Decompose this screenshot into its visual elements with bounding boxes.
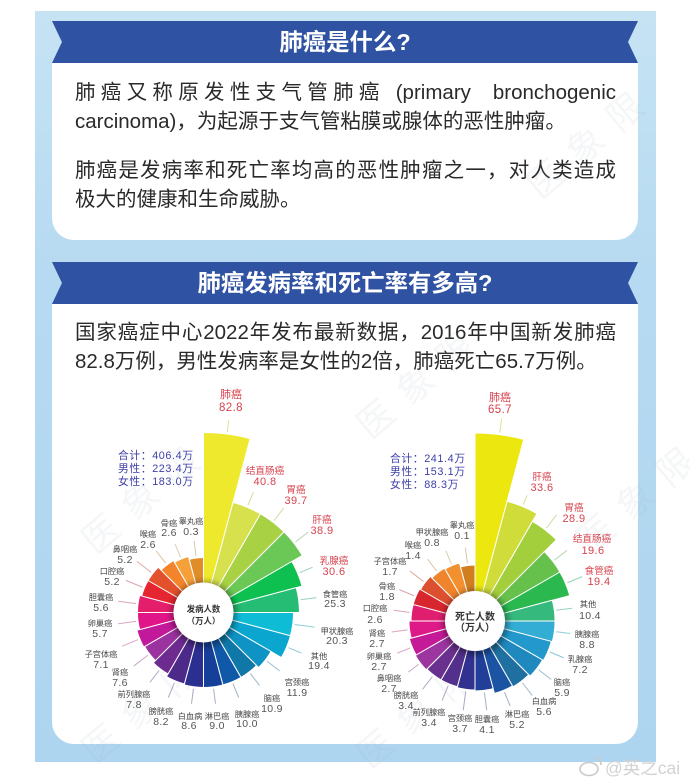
labels: deaths highlighted: 19.4 bbox=[587, 576, 611, 588]
labels: new cases others: 肾癌 bbox=[112, 667, 128, 677]
labels: deaths highlighted: 28.9 bbox=[562, 513, 586, 525]
labels: deaths others: 3.4 bbox=[421, 717, 437, 729]
labels: deaths highlighted: 33.6 bbox=[530, 482, 554, 494]
labels: deaths others: 睾丸癌 bbox=[450, 520, 474, 530]
labels: new cases highlighted: 结直肠癌 bbox=[246, 465, 285, 477]
labels: new cases others: 子宫体癌 bbox=[85, 649, 117, 659]
labels: deaths others: 2.7 bbox=[369, 638, 385, 650]
labels: deaths others: 10.4 bbox=[579, 610, 601, 622]
heading: what is lung cancer: 肺癌是什么? bbox=[279, 29, 411, 55]
weibo watermark: @英之cai bbox=[605, 758, 680, 778]
labels: deaths others: 1.7 bbox=[382, 566, 398, 578]
totals: new cases: 合计：406.4万 bbox=[118, 448, 194, 462]
labels: deaths highlighted bbox=[488, 390, 614, 588]
labels: new cases highlighted: 肺癌 bbox=[220, 387, 242, 401]
watermarks: 医象限 bbox=[349, 644, 495, 776]
labels: deaths others: 脑癌 bbox=[554, 677, 570, 687]
labels: new cases others: 7.8 bbox=[126, 699, 142, 711]
labels: deaths others: 宫颈癌 bbox=[448, 713, 472, 723]
watermarks: 医象限 bbox=[519, 74, 665, 206]
labels: new cases others: 25.3 bbox=[324, 598, 346, 610]
centre circle: deaths: （万人） bbox=[455, 622, 495, 634]
totals: deaths: 男性：153.1万 bbox=[390, 464, 466, 478]
heading: what is lung cancer bbox=[52, 21, 638, 63]
labels: new cases highlighted: 40.8 bbox=[253, 476, 277, 488]
leader lines: deaths bbox=[392, 419, 582, 710]
labels: deaths others: 子宫体癌 bbox=[374, 556, 406, 566]
labels: deaths highlighted: 食管癌 bbox=[585, 565, 614, 577]
labels: new cases others: 5.6 bbox=[93, 602, 109, 614]
labels: new cases highlighted: 38.9 bbox=[310, 525, 334, 537]
labels: deaths others: 口腔癌 bbox=[363, 603, 387, 613]
text: definition line 2: carcinoma)，为起源于支气管粘膜或腺体的恶性肿瘤。 bbox=[75, 110, 566, 133]
labels: deaths others: 骨癌 bbox=[379, 581, 395, 591]
text: severity line 1: 肺癌是发病率和死亡率均高的恶性肿瘤之一，对人类造成 bbox=[75, 159, 616, 182]
labels: new cases highlighted: 肝癌 bbox=[312, 514, 332, 526]
labels: deaths others: 1.8 bbox=[379, 591, 395, 603]
labels: deaths highlighted: 肺癌 bbox=[489, 390, 511, 404]
labels: new cases others bbox=[85, 516, 353, 732]
labels: new cases others: 2.6 bbox=[161, 527, 177, 539]
labels: deaths others: 8.8 bbox=[579, 639, 595, 651]
totals: deaths bbox=[390, 451, 466, 491]
text: severity line 2: 极大的健康和生命威胁。 bbox=[75, 188, 300, 211]
labels: new cases others: 7.1 bbox=[93, 659, 109, 671]
labels: deaths others: 鼻咽癌 bbox=[377, 673, 401, 683]
labels: deaths others: 3.4 bbox=[398, 700, 414, 712]
labels: deaths others: 2.6 bbox=[367, 614, 383, 626]
labels: new cases highlighted bbox=[219, 387, 349, 578]
labels: deaths others: 4.1 bbox=[479, 724, 495, 736]
labels: deaths highlighted: 肝癌 bbox=[532, 471, 552, 483]
labels: new cases others: 骨癌 bbox=[161, 518, 177, 528]
labels: deaths others: 甲状腺癌 bbox=[416, 527, 448, 537]
labels: deaths others: 白血病 bbox=[532, 696, 556, 706]
labels: new cases others: 鼻咽癌 bbox=[113, 544, 137, 554]
labels: deaths others: 卵巢癌 bbox=[367, 651, 391, 661]
labels: deaths others: 2.7 bbox=[371, 661, 387, 673]
labels: new cases highlighted: 乳腺癌 bbox=[320, 555, 349, 567]
labels: new cases others: 胰腺癌 bbox=[235, 709, 259, 719]
labels: deaths others: 3.7 bbox=[452, 723, 468, 735]
labels: deaths others: 其他 bbox=[580, 599, 596, 609]
totals: new cases: 女性：183.0万 bbox=[118, 474, 194, 488]
labels: new cases others: 5.7 bbox=[92, 628, 108, 640]
totals: deaths: 女性：88.3万 bbox=[390, 477, 459, 491]
labels: new cases others: 11.9 bbox=[287, 687, 307, 699]
labels: deaths others: 肾癌 bbox=[369, 628, 385, 638]
labels: new cases others: 7.6 bbox=[112, 677, 128, 689]
labels: deaths others: 胰腺癌 bbox=[575, 629, 599, 639]
labels: deaths others: 喉癌 bbox=[405, 540, 421, 550]
labels: deaths highlighted: 65.7 bbox=[488, 404, 512, 416]
leader lines: new cases bbox=[118, 420, 317, 704]
labels: new cases others: 卵巢癌 bbox=[88, 618, 112, 628]
centre circle: new cases bbox=[174, 582, 234, 642]
labels: new cases highlighted: 胃癌 bbox=[286, 484, 306, 496]
heading: how high are the rates bbox=[52, 262, 638, 304]
labels: deaths others bbox=[363, 520, 601, 736]
panel: what is lung cancer bbox=[52, 63, 638, 240]
labels: deaths highlighted: 胃癌 bbox=[564, 502, 584, 514]
labels: deaths others: 7.2 bbox=[572, 664, 588, 676]
labels: deaths others: 5.2 bbox=[509, 719, 525, 731]
labels: deaths others: 胆囊癌 bbox=[475, 714, 499, 724]
labels: new cases highlighted: 82.8 bbox=[219, 402, 243, 414]
labels: new cases others: 胆囊癌 bbox=[89, 592, 113, 602]
wedges: new cases bbox=[135, 432, 305, 690]
centre circle shadow: deaths bbox=[442, 590, 508, 656]
labels: deaths others: 乳腺癌 bbox=[568, 654, 592, 664]
labels: new cases others: 前列腺癌 bbox=[118, 689, 150, 699]
text: definition line 1: 肺癌又称原发性支气管肺癌 (primary bronchogenic bbox=[75, 81, 616, 104]
labels: new cases others: 10.0 bbox=[236, 718, 258, 730]
totals: new cases bbox=[118, 448, 194, 488]
labels: new cases others: 睾丸癌 bbox=[179, 516, 203, 526]
labels: deaths others: 0.1 bbox=[454, 530, 470, 542]
labels: new cases others: 食管癌 bbox=[323, 589, 347, 599]
labels: deaths others: 0.8 bbox=[424, 537, 440, 549]
labels: new cases others: 9.0 bbox=[209, 720, 225, 732]
wedges: deaths bbox=[407, 433, 573, 696]
labels: new cases others: 5.2 bbox=[104, 576, 120, 588]
heading: how high are the rates: 肺癌发病率和死亡率有多高? bbox=[198, 270, 492, 296]
centre circle: deaths: 死亡人数 bbox=[455, 610, 495, 623]
labels: new cases others: 20.3 bbox=[326, 635, 348, 647]
labels: deaths others: 1.4 bbox=[405, 550, 421, 562]
labels: deaths highlighted: 结直肠癌 bbox=[573, 533, 612, 545]
labels: deaths others: 5.6 bbox=[536, 706, 552, 718]
labels: deaths others: 2.7 bbox=[381, 683, 397, 695]
labels: new cases highlighted: 30.6 bbox=[322, 566, 346, 578]
panel: incidence and mortality bbox=[52, 304, 638, 744]
labels: deaths others: 淋巴癌 bbox=[505, 709, 529, 719]
labels: new cases others: 其他 bbox=[311, 651, 327, 661]
labels: new cases others: 白血病 bbox=[178, 711, 202, 721]
labels: new cases others: 喉癌 bbox=[140, 529, 156, 539]
labels: deaths others: 前列腺癌 bbox=[413, 707, 445, 717]
labels: new cases others: 2.6 bbox=[140, 539, 156, 551]
labels: new cases others: 19.4 bbox=[308, 660, 330, 672]
labels: new cases others: 甲状腺癌 bbox=[321, 626, 353, 636]
labels: deaths others: 5.9 bbox=[554, 687, 570, 699]
labels: new cases others: 脑癌 bbox=[264, 693, 280, 703]
labels: new cases highlighted: 39.7 bbox=[284, 495, 308, 507]
labels: new cases others: 膀胱癌 bbox=[149, 706, 173, 716]
labels: new cases others: 淋巴癌 bbox=[205, 711, 229, 721]
labels: deaths highlighted: 19.6 bbox=[581, 545, 605, 557]
text: statistics line 2: 82.8万例，男性发病率是女性的2倍，肺癌死亡65.7万例。 bbox=[75, 350, 597, 373]
labels: new cases others: 口腔癌 bbox=[100, 566, 124, 576]
watermarks: 医象限 bbox=[74, 429, 220, 561]
chart: new cases rose chart bbox=[85, 387, 353, 732]
totals: new cases: 男性：223.4万 bbox=[118, 461, 194, 475]
watermarks: 医象限 bbox=[74, 639, 220, 771]
labels: new cases others: 10.9 bbox=[261, 703, 283, 715]
centre circle: new cases: 发病人数 bbox=[187, 604, 221, 614]
watermarks: 医象限 bbox=[349, 314, 495, 446]
centre circle shadow: new cases bbox=[171, 581, 237, 647]
labels: new cases others: 宫颈癌 bbox=[285, 677, 309, 687]
chart: deaths rose chart bbox=[363, 390, 614, 736]
centre circle: deaths bbox=[445, 591, 505, 651]
centre circle: new cases: （万人） bbox=[187, 616, 220, 626]
labels: new cases others: 8.6 bbox=[181, 720, 197, 732]
labels: new cases others: 5.2 bbox=[117, 554, 133, 566]
labels: new cases others: 0.3 bbox=[183, 526, 199, 538]
labels: deaths others: 膀胱癌 bbox=[394, 690, 418, 700]
text: statistics line 1: 国家癌症中心2022年发布最新数据，2016年中国新发肺癌 bbox=[75, 321, 616, 344]
totals: deaths: 合计：241.4万 bbox=[390, 451, 466, 465]
labels: new cases others: 8.2 bbox=[153, 716, 169, 728]
